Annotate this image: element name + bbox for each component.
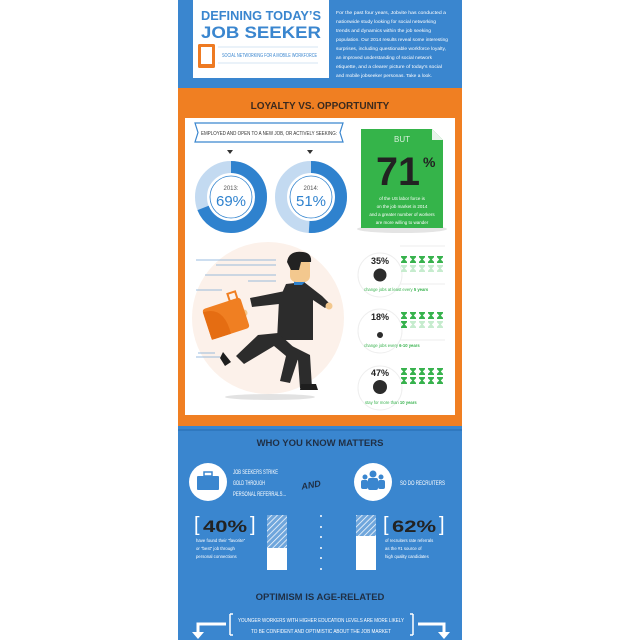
panel: who you know matters (178, 426, 462, 640)
green callout 71% (357, 129, 447, 233)
stat 40%: personal connections (196, 554, 237, 559)
text: job seekers: GOLD THROUGH (233, 481, 265, 487)
intro text: an improved understanding of social network (336, 55, 433, 60)
title card: JOB SEEKER (201, 23, 321, 42)
stat: 35%: change jobs at least every 5 years (364, 287, 429, 292)
intro text: etiquette, and a clearer picture of today's social (336, 64, 442, 69)
heading: LOYALTY VS. OPPORTUNITY (251, 101, 390, 112)
bar 62% (356, 515, 376, 570)
donut 2013 (201, 150, 261, 227)
donut 2014: 51% (296, 193, 326, 210)
stat 62% (383, 514, 445, 559)
text: job seekers (233, 470, 286, 498)
title card (193, 0, 329, 78)
heading: optimism: OPTIMISM IS AGE-RELATED (256, 592, 385, 603)
stat 62%: ] (439, 514, 445, 536)
and: AND (300, 478, 322, 492)
bracket text: YOUNGER WORKERS WITH HIGHER EDUCATION LEVELS ARE MORE LIKELY (238, 618, 404, 624)
stat 62%: high quality candidates (385, 554, 429, 559)
intro text: and mobile jobseeker personas. Take a look. (336, 73, 432, 78)
stat 40%: 40% (203, 517, 247, 536)
bar 40% (267, 515, 287, 570)
stat: 18%: 18% (371, 312, 389, 322)
intro text: population. Our 2014 results reveal some interesting (336, 37, 448, 42)
stat: 18% (358, 309, 445, 353)
bracket text: TO BE CONFIDENT AND OPTIMISTIC ABOUT THE JOB MARKET (251, 629, 392, 635)
stat 40%: or "best" job through (196, 546, 235, 551)
banner (195, 123, 343, 142)
icon: briefcase (189, 463, 227, 501)
heading: WHO YOU KNOW MATTERS (257, 438, 383, 449)
arrow right (418, 624, 450, 639)
donut 2013: 69% (216, 193, 246, 210)
text: recruiters: SO DO RECRUITERS (400, 481, 445, 487)
icon: phone (198, 44, 215, 68)
title card: SOCIAL NETWORKING FOR A MOBILE WORKFORCE (222, 53, 317, 59)
dots (320, 515, 322, 570)
header band (178, 0, 462, 90)
stat 62%: [ (383, 514, 389, 536)
intro text: trends and dynamics within the job seeking (336, 28, 431, 33)
stat 62%: 62% (392, 517, 436, 536)
illustration: running man (192, 242, 344, 400)
text: job seekers: PERSONAL REFERRALS... (233, 492, 286, 498)
green callout 71%: are more willing to wander (376, 220, 429, 225)
arrow left (192, 624, 226, 639)
stat: 35% (358, 246, 445, 297)
intro text (336, 10, 448, 78)
panel: loyalty vs opportunity (178, 88, 462, 426)
stat 40%: [ (194, 514, 200, 536)
intro text: nationwide study looking for social networking (336, 19, 436, 24)
donut 2014 (281, 150, 341, 227)
stat: 47%: 47% (371, 368, 389, 378)
green callout 71%: of the US labor force is (379, 196, 426, 201)
intro text: surprises, including questionable workforce loyalty, (336, 46, 446, 51)
intro text: For the past four years, Jobvite has conducted a (336, 10, 446, 15)
green callout 71%: % (423, 154, 436, 170)
green callout 71%: BUT (394, 135, 410, 144)
stat 40% (194, 514, 256, 559)
stat 62%: of recruiters rate referrals (385, 538, 433, 543)
green callout 71%: 71 (376, 150, 420, 194)
text: job seekers: JOB SEEKERS STRIKE (233, 470, 278, 476)
stat: 35%: 35% (371, 256, 389, 266)
donut 2013: 2013: (223, 186, 239, 192)
stat: 18%: change jobs every 6-10 years (364, 343, 420, 348)
bracket text (230, 614, 413, 635)
icon: people (354, 463, 392, 501)
stat 40%: ] (250, 514, 256, 536)
stat 40%: have found their "favorite" (196, 538, 246, 543)
donut 2014: 2014: (303, 186, 319, 192)
stat: 47% (358, 366, 443, 410)
title card: DEFINING TODAY’S (201, 8, 321, 23)
green callout 71%: on the job market in 2014 (377, 204, 428, 209)
banner: EMPLOYED AND OPEN TO A NEW JOB, OR ACTIVELY SEEKING: (201, 131, 337, 137)
stat: 47%: stay for more than 10 years (365, 400, 417, 405)
green callout 71%: and a greater number of workers (369, 212, 435, 217)
stat 62%: as the #1 source of (385, 546, 422, 551)
